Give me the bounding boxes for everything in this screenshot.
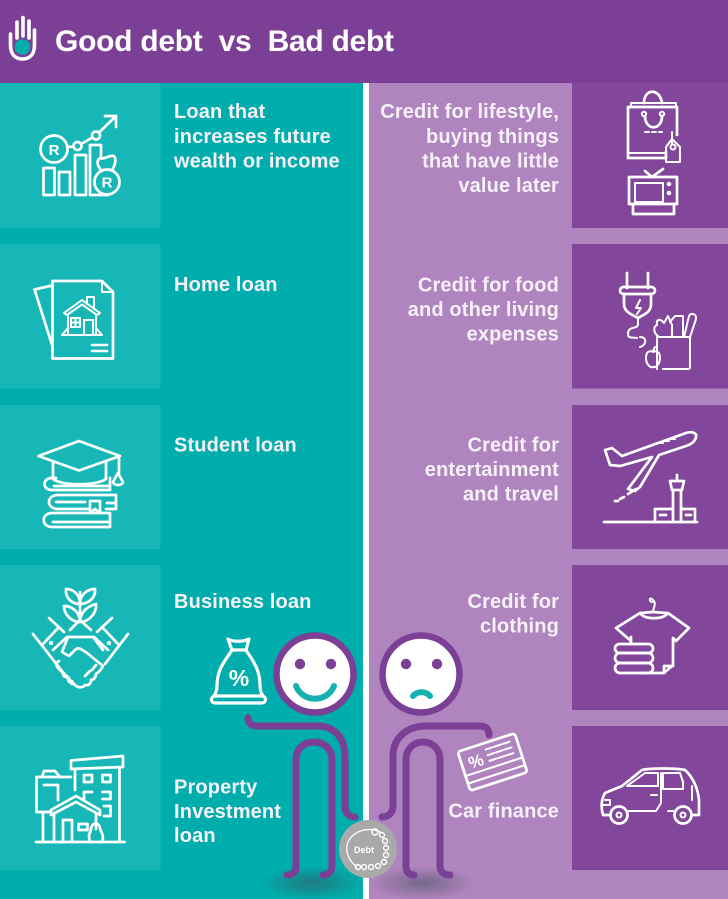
text: good debt labels: loan — [174, 825, 216, 847]
icon: debt ball and chain — [339, 820, 397, 878]
text: bad debt labels — [380, 101, 559, 822]
icon: plug and groceries — [620, 273, 696, 369]
icon: credit card — [458, 733, 527, 791]
icon: shopping bag and tag — [628, 92, 680, 214]
text: bad debt labels: Credit for — [468, 434, 559, 456]
text: bad debt labels: entertainment — [425, 459, 559, 481]
text: good debt labels: Business loan — [174, 591, 312, 613]
icon: growth chart with money: R — [49, 142, 60, 159]
icon: handshake with plant — [33, 589, 128, 687]
icon: home loan document — [34, 281, 113, 358]
icon: growth chart with money: R — [102, 174, 113, 192]
shadows under figures — [260, 866, 475, 899]
text: bad debt labels: Credit for lifestyle, — [380, 101, 559, 123]
text: bad debt labels: Credit for food — [418, 274, 559, 296]
icon: t-shirt and folded clothes — [615, 598, 689, 673]
text: good debt labels: Property — [174, 776, 258, 798]
text: bad debt labels: Car finance — [448, 800, 559, 822]
figure: happy person — [248, 636, 355, 875]
header band — [0, 0, 728, 83]
text: bad debt labels: and travel — [463, 484, 559, 506]
icon: property buildings — [36, 756, 124, 842]
text: good debt labels: Student loan — [174, 434, 297, 456]
icon: credit card: % — [466, 750, 486, 773]
text: bad debt labels: that have little — [422, 150, 559, 172]
text: bad debt labels: Credit for — [468, 591, 559, 613]
icon: money bag with percent — [212, 639, 266, 703]
title: Good debt vs Bad debt — [55, 25, 394, 58]
text: good debt labels: Loan that — [174, 101, 266, 123]
icon: growth chart with money — [40, 116, 120, 195]
icon: car — [602, 768, 699, 824]
text: good debt labels — [173, 101, 340, 847]
text: bad debt labels: value later — [458, 175, 559, 197]
icon: hand logo — [10, 18, 34, 59]
figure: sad person — [382, 636, 489, 875]
icon: graduation cap and books — [38, 441, 123, 527]
panel: good debt background — [0, 83, 363, 899]
text: bad debt labels: and other living — [408, 299, 559, 321]
text: bad debt labels: expenses — [467, 324, 559, 346]
icon: plane and airport — [604, 432, 697, 522]
text: good debt labels: increases future — [174, 126, 331, 148]
text: good debt labels: Home loan — [174, 274, 278, 296]
right row panels — [572, 83, 728, 870]
panel: bad debt background — [369, 83, 728, 899]
icon: money bag with percent: % — [229, 665, 249, 691]
text: good debt labels: wealth or income — [173, 150, 340, 172]
text: bad debt labels: buying things — [426, 126, 559, 148]
text: bad debt labels: clothing — [480, 616, 559, 638]
icon: debt ball and chain: Debt — [354, 845, 374, 855]
left row panels — [0, 83, 160, 870]
text: good debt labels: Investment — [174, 801, 281, 823]
